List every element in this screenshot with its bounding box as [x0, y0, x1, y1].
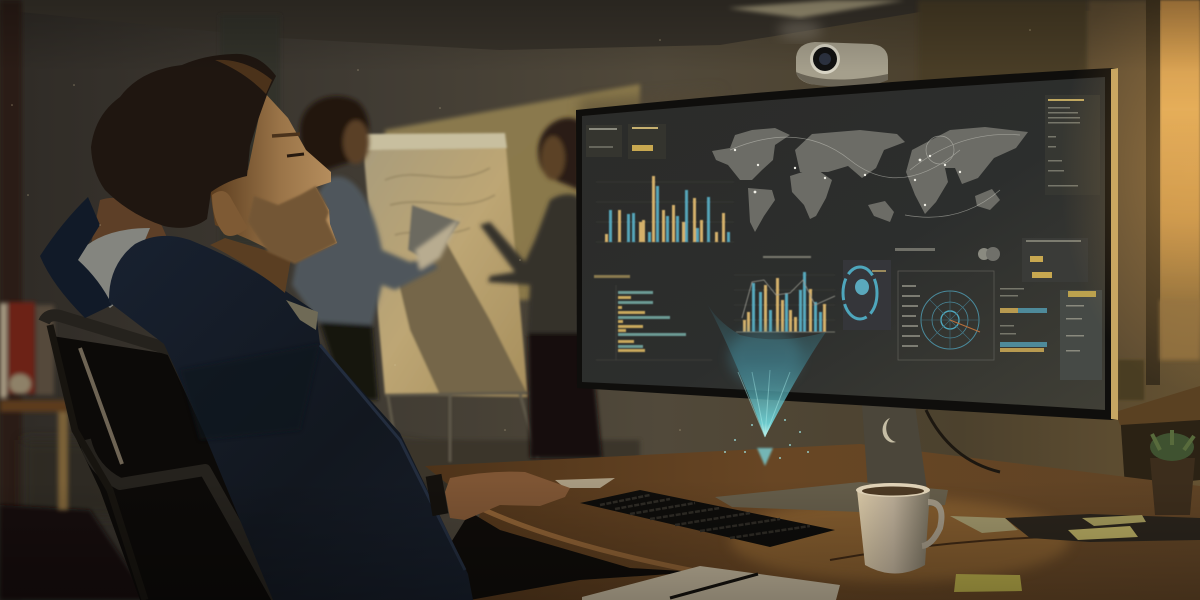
monitor bezel	[576, 68, 1118, 420]
top-left info panel	[586, 124, 666, 159]
face	[210, 92, 337, 262]
ear	[212, 191, 248, 236]
hologram base sparkle	[757, 448, 773, 466]
desk plank seam	[830, 535, 1200, 560]
map route lines and points	[730, 134, 1020, 217]
right-side status panels	[1000, 95, 1102, 380]
wooden desk	[425, 444, 1200, 600]
continent: australia	[975, 189, 1000, 210]
shirt collar	[286, 300, 318, 330]
white shirt sleeve	[76, 228, 150, 308]
ceiling	[0, 0, 1200, 50]
radar chart panel	[895, 247, 1000, 360]
floating dust specks	[11, 29, 1031, 431]
continent: small south	[868, 201, 894, 222]
dark floor	[0, 505, 150, 600]
left dark pillar	[0, 0, 22, 600]
continent: east large	[906, 127, 1028, 214]
blurred colleague with flipchart	[292, 96, 602, 462]
smoke above projector	[778, 20, 822, 40]
right wall column	[918, 0, 1088, 110]
desk papers and notes	[555, 478, 1200, 600]
sleeve shadow	[180, 344, 320, 440]
colleague 1	[292, 96, 460, 400]
horizontal bar chart	[594, 275, 712, 360]
chair light strip	[80, 348, 122, 464]
sunlight patch on wall	[385, 84, 640, 300]
hand behind head	[90, 198, 168, 250]
continent: centre	[795, 130, 905, 178]
right sideboard	[1120, 388, 1200, 488]
desk front shadow	[440, 512, 700, 600]
lower wall shade	[22, 440, 560, 520]
monitor gold edge	[1111, 68, 1118, 420]
neck	[210, 238, 291, 293]
ring gauge widget	[843, 260, 891, 330]
screen	[582, 77, 1105, 410]
window frame	[1146, 0, 1160, 385]
left shelf with binders	[0, 302, 68, 510]
potted plant	[1150, 430, 1195, 515]
hair	[91, 54, 276, 228]
chair	[44, 315, 295, 600]
ceiling light	[728, 0, 905, 18]
world map	[712, 127, 1028, 232]
colleague 2	[480, 118, 602, 458]
flipchart	[362, 133, 538, 462]
continent: north	[712, 128, 790, 180]
paper under hand	[555, 478, 615, 488]
beard	[248, 186, 337, 264]
desk sunlit area	[730, 498, 1070, 582]
lapel edge	[320, 345, 465, 570]
notebook with pen	[582, 566, 840, 600]
jacket	[40, 197, 112, 318]
projector lens	[810, 44, 840, 74]
keyboard	[580, 490, 835, 547]
resting forearm and hand	[445, 472, 570, 520]
bar chart: top left	[596, 176, 734, 242]
city glow in window	[1160, 300, 1200, 360]
bar chart: centre with trend line	[734, 256, 835, 332]
coffee mug	[856, 483, 942, 574]
projector	[778, 20, 888, 98]
continent: africa	[790, 168, 832, 219]
seated analyst	[40, 54, 570, 600]
hologram light cone	[705, 300, 826, 466]
curved monitor	[576, 68, 1118, 420]
continent: south	[748, 188, 775, 232]
monitor stand	[715, 405, 1000, 512]
window	[1160, 0, 1200, 362]
sticky note	[954, 574, 1022, 592]
middle dark pillar	[220, 15, 280, 245]
eye and brow	[287, 154, 304, 156]
